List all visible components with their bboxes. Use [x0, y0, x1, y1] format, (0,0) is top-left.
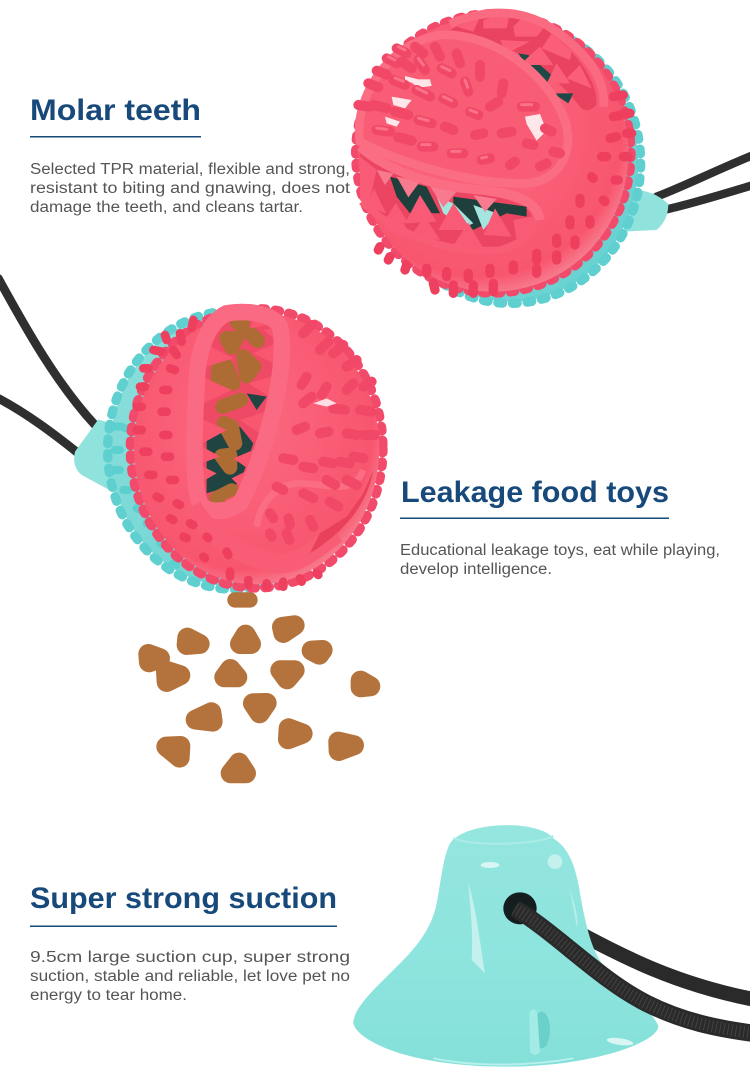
heading: Leakage food toys: Leakage food toys	[401, 476, 669, 509]
heading rule	[30, 926, 337, 927]
face studs	[358, 47, 560, 167]
description: suction: suction, stable and reliable, let love pet no	[30, 968, 350, 985]
right dome edge	[310, 470, 373, 553]
rope: ball one cords	[657, 155, 750, 209]
dome studs	[270, 325, 375, 540]
product photo: leakage food ball	[0, 278, 383, 589]
teeth	[197, 320, 280, 508]
domed studded face	[359, 35, 568, 183]
rope behind the cup	[570, 928, 750, 999]
lower mouth with teeth	[360, 147, 540, 251]
description: leakage food	[400, 542, 720, 578]
body highlight	[313, 398, 337, 407]
teal half with spikes	[379, 23, 641, 303]
description: suction: energy to tear home.	[30, 987, 187, 1004]
rope: ball two cords	[0, 278, 95, 453]
body studs	[137, 320, 318, 587]
scattered food pellets	[148, 600, 370, 773]
description: suction: 9.5cm large suction cup, super strong	[30, 949, 350, 966]
heading: Molar teeth: Molar teeth	[30, 94, 201, 127]
teal connector	[623, 190, 668, 232]
description: leakage food: develop intelligence.	[400, 561, 552, 578]
description: leakage food: Educational leakage toys, eat while playing,	[400, 542, 720, 559]
description: molar teeth: resistant to biting and gnawing, does not	[30, 180, 351, 197]
teal studs	[115, 427, 177, 565]
product photo: molar teeth ball	[356, 12, 750, 303]
rope through the hole	[515, 908, 750, 1033]
body studs	[378, 95, 632, 293]
description: molar teeth: damage the teeth, and cleans tartar.	[30, 199, 303, 216]
heading rule	[400, 518, 669, 519]
wide band under mouth	[192, 507, 337, 563]
pink half	[356, 14, 631, 293]
vertical mouth	[194, 312, 282, 511]
hole	[503, 892, 537, 924]
description: molar teeth: Selected TPR material, flexible and strong,	[30, 161, 350, 178]
pink half	[131, 309, 383, 588]
heading rule	[30, 136, 201, 138]
product photo: suction cup	[353, 825, 750, 1067]
teal half with spikes	[108, 311, 362, 589]
heading: Super strong suction: Super strong suction	[30, 882, 337, 915]
teal connector	[74, 419, 130, 497]
bell body	[353, 825, 658, 1067]
upper mouth with teeth	[450, 12, 604, 110]
food pieces in mouth	[217, 322, 258, 498]
face highlights	[385, 76, 547, 141]
cup details	[433, 836, 634, 1065]
description: molar teeth	[30, 161, 351, 216]
description: suction	[30, 949, 350, 1004]
